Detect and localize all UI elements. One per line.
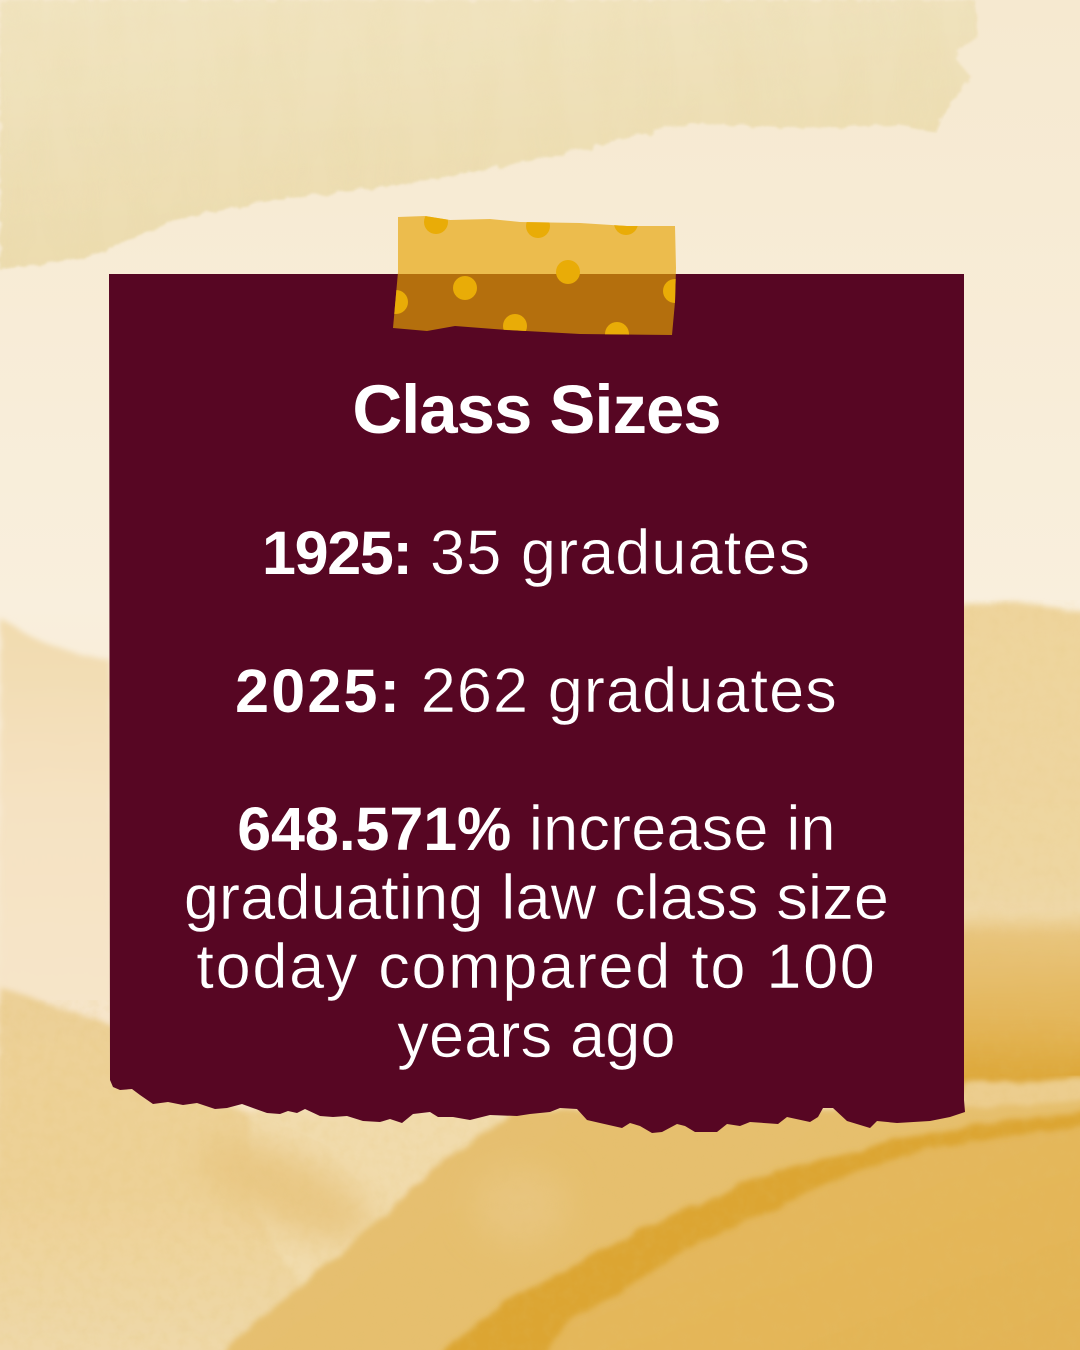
text: percentage increase: 648.571% increase in	[237, 794, 836, 864]
text: 2025 stat: 2025: 262 graduates	[235, 656, 838, 726]
text: percentage increase: graduating law class size	[184, 863, 889, 933]
title: Class Sizes	[352, 371, 721, 448]
text: 1925 stat: 1925: 35 graduates	[262, 518, 811, 588]
text: percentage increase: years ago	[397, 1001, 676, 1071]
icon: polka dot tape	[393, 216, 676, 335]
text: percentage increase: today compared to 100	[196, 932, 877, 1002]
text: percentage increase	[184, 794, 889, 1071]
